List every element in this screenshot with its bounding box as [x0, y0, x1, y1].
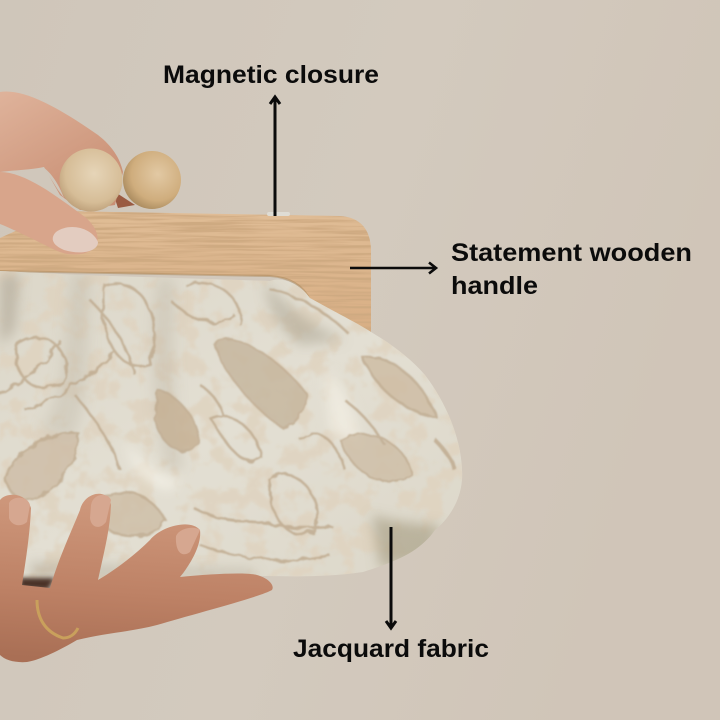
icon: fingernails	[9, 495, 200, 554]
arrow: to wooden handle	[350, 262, 436, 274]
product photo infographic	[0, 65, 690, 662]
arrow: to jacquard fabric	[386, 527, 396, 628]
fabric pattern	[0, 282, 455, 560]
shadow behind balls	[112, 190, 135, 208]
icon: gold ring	[37, 600, 78, 638]
jacquard fabric bag body	[0, 270, 465, 582]
fabric mottled jacquard texture	[0, 270, 465, 582]
fabric shading folds	[0, 272, 440, 578]
magnetic clasp detail	[267, 212, 290, 216]
shadow under bag	[20, 578, 55, 590]
wooden ball clasp	[60, 148, 181, 212]
upper hand	[0, 92, 135, 254]
label: Jacquard fabric: Jacquard fabric	[293, 635, 489, 663]
wooden handle	[0, 205, 375, 335]
label: Statement wooden handle: handle	[451, 272, 538, 300]
arrow: to magnetic closure	[270, 97, 280, 216]
gap between fingers	[43, 167, 64, 198]
label: Statement wooden handle: Statement wooden	[451, 239, 692, 267]
lower hand	[0, 494, 273, 662]
label: Magnetic closure: Magnetic closure	[163, 61, 379, 89]
icon: thumbnail	[53, 227, 98, 252]
